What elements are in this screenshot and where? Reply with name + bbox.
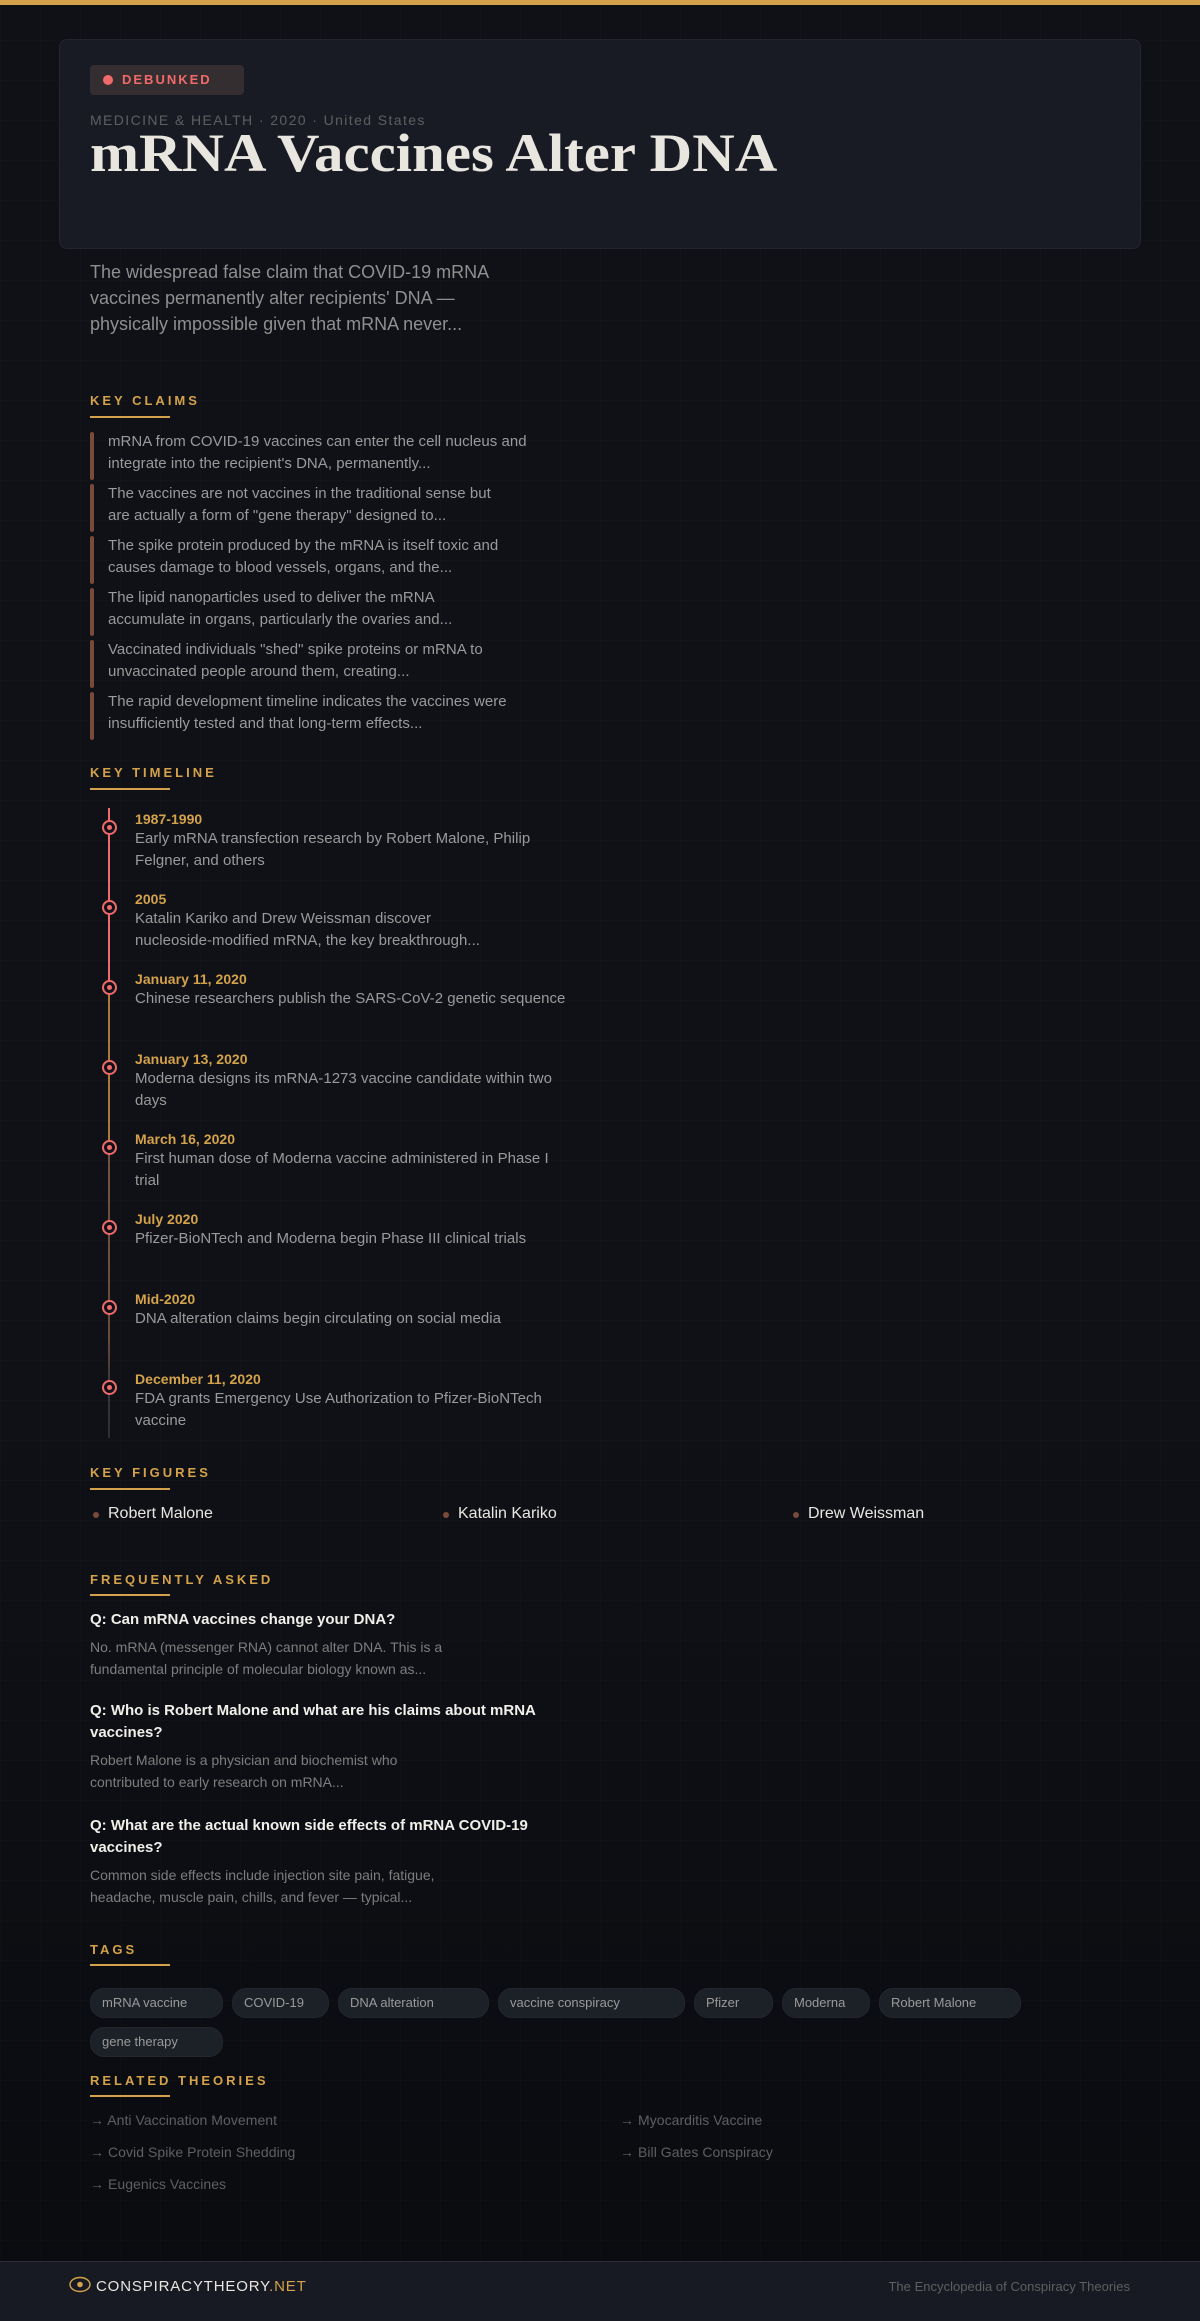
text: 1987-1990 bbox=[135, 811, 202, 827]
claim 1: mRNA from COVID-19 vaccines can enter the cell nucleus and bbox=[108, 433, 527, 450]
text: Mid-2020 bbox=[135, 1291, 195, 1307]
panel: key claims list bbox=[90, 432, 527, 740]
claim 5: Vaccinated individuals "shed" spike proteins or mRNA to bbox=[108, 641, 483, 658]
related theory: → Bill Gates Conspiracy bbox=[620, 2144, 773, 2160]
icon: status dot bbox=[103, 75, 113, 85]
claim 6: insufficiently tested and that long-term effects... bbox=[108, 715, 422, 732]
related theory: → Anti Vaccination Movement bbox=[90, 2112, 277, 2128]
question 2 bbox=[90, 1702, 536, 1741]
event marker 4 bbox=[102, 1060, 116, 1075]
heading: key timeline: KEY TIMELINE bbox=[90, 765, 217, 780]
text: Moderna designs its mRNA-1273 vaccine candidate within two bbox=[135, 1070, 552, 1087]
text: Pfizer-BioNTech and Moderna begin Phase III clinical trials bbox=[135, 1230, 526, 1247]
claim 4 bbox=[90, 588, 452, 636]
tag bbox=[90, 2027, 223, 2057]
claim 2: are actually a form of "gene therapy" designed to... bbox=[108, 507, 446, 524]
question 2: vaccines? bbox=[90, 1724, 163, 1741]
tag: Moderna bbox=[794, 1995, 845, 2010]
event marker 2 bbox=[102, 900, 116, 915]
figure: Katalin Kariko: Katalin Kariko bbox=[458, 1505, 557, 1522]
claim 6: The rapid development timeline indicates the vaccines were bbox=[108, 693, 507, 710]
top accent bar bbox=[0, 0, 1200, 5]
tag: Robert Malone bbox=[891, 1995, 976, 2010]
tag bbox=[498, 1988, 685, 2018]
question 3 bbox=[90, 1817, 528, 1856]
answer 3: Common side effects include injection site pain, fatigue, bbox=[90, 1867, 434, 1883]
text: Katalin Kariko and Drew Weissman discover bbox=[135, 910, 431, 927]
tag bbox=[879, 1988, 1021, 2018]
claim 3: causes damage to blood vessels, organs, and the... bbox=[108, 559, 452, 576]
text: March 16, 2020 bbox=[135, 1131, 235, 1147]
footer bbox=[0, 2261, 1200, 2321]
tag: COVID-19 bbox=[244, 1995, 304, 2010]
figure: Robert Malone: Robert Malone bbox=[108, 1505, 213, 1522]
tag: vaccine conspiracy bbox=[510, 1995, 620, 2010]
category and date line: MEDICINE & HEALTH · 2020 · United States bbox=[90, 112, 426, 128]
panel: hero header bbox=[59, 39, 1141, 249]
text: Early mRNA transfection research by Robert Malone, Philip bbox=[135, 830, 530, 847]
claim 6 bbox=[90, 692, 507, 740]
answer 1 bbox=[90, 1639, 442, 1677]
text: 2005 bbox=[135, 891, 166, 907]
tag: DNA alteration bbox=[350, 1995, 434, 2010]
claim 5: unvaccinated people around them, creating... bbox=[108, 663, 410, 680]
summary text: vaccines permanently alter recipients' DNA — bbox=[90, 288, 455, 308]
logo wordmark: CONSPIRACYTHEORY.NET bbox=[96, 2278, 307, 2295]
related theory: → Myocarditis Vaccine bbox=[620, 2112, 762, 2128]
question 1: Q: Can mRNA vaccines change your DNA? bbox=[90, 1611, 395, 1628]
event 8 bbox=[135, 1371, 542, 1429]
tag: mRNA vaccine bbox=[102, 1995, 187, 2010]
footer tagline: The Encyclopedia of Conspiracy Theories bbox=[888, 2279, 1130, 2294]
heading: frequently asked: FREQUENTLY ASKED bbox=[90, 1572, 273, 1587]
text: vaccine bbox=[135, 1412, 186, 1429]
claim 4: The lipid nanoparticles used to deliver the mRNA bbox=[108, 589, 435, 606]
event 2 bbox=[135, 891, 480, 949]
summary text: The widespread false claim that COVID-19 mRNA bbox=[90, 262, 489, 282]
event 5 bbox=[135, 1131, 549, 1189]
claim 1 bbox=[90, 432, 527, 480]
claim 3 bbox=[90, 536, 498, 584]
question 3: Q: What are the actual known side effects of mRNA COVID-19 bbox=[90, 1817, 528, 1834]
heading: related theories: RELATED THEORIES bbox=[90, 2073, 268, 2088]
text: First human dose of Moderna vaccine administered in Phase I bbox=[135, 1150, 549, 1167]
event marker 5 bbox=[102, 1140, 116, 1155]
text: July 2020 bbox=[135, 1211, 198, 1227]
text: December 11, 2020 bbox=[135, 1371, 261, 1387]
claim 5 bbox=[90, 640, 483, 688]
tag bbox=[338, 1988, 489, 2018]
event marker 6 bbox=[102, 1220, 116, 1235]
answer 3: headache, muscle pain, chills, and fever — typical... bbox=[90, 1889, 412, 1905]
answer 3 bbox=[90, 1867, 434, 1905]
event marker 8 bbox=[102, 1380, 116, 1395]
related theory: → Covid Spike Protein Shedding bbox=[90, 2144, 295, 2160]
answer 2: contributed to early research on mRNA... bbox=[90, 1774, 344, 1790]
tag bbox=[782, 1988, 870, 2018]
text: nucleoside-modified mRNA, the key breakthrough... bbox=[135, 932, 480, 949]
answer 2: Robert Malone is a physician and biochemist who bbox=[90, 1752, 397, 1768]
tag: Pfizer bbox=[706, 1995, 739, 2010]
tag: gene therapy bbox=[102, 2034, 178, 2049]
answer 1: fundamental principle of molecular biology known as... bbox=[90, 1661, 426, 1677]
answer 1: No. mRNA (messenger RNA) cannot alter DNA. This is a bbox=[90, 1639, 442, 1655]
event 3 bbox=[135, 971, 565, 1007]
related theory: → Eugenics Vaccines bbox=[90, 2176, 226, 2192]
event marker 7 bbox=[102, 1300, 116, 1315]
text: trial bbox=[135, 1172, 159, 1189]
event 1 bbox=[135, 811, 530, 869]
question 2: Q: Who is Robert Malone and what are his claims about mRNA bbox=[90, 1702, 536, 1719]
claim 3: The spike protein produced by the mRNA is itself toxic and bbox=[108, 537, 498, 554]
timeline axis bbox=[108, 808, 110, 1438]
text: FDA grants Emergency Use Authorization to Pfizer-BioNTech bbox=[135, 1390, 542, 1407]
claim 4: accumulate in organs, particularly the ovaries and... bbox=[108, 611, 452, 628]
heading: tags: TAGS bbox=[90, 1942, 137, 1957]
tag bbox=[90, 1988, 223, 2018]
figure: Drew Weissman: Drew Weissman bbox=[808, 1505, 924, 1522]
badge label: DEBUNKED bbox=[122, 72, 212, 87]
event marker 1 bbox=[102, 820, 116, 835]
claim 1: integrate into the recipient's DNA, permanently... bbox=[108, 455, 431, 472]
timeline bbox=[108, 808, 110, 1438]
heading: key figures: KEY FIGURES bbox=[90, 1465, 211, 1480]
claim 2 bbox=[90, 484, 491, 532]
claim 2: The vaccines are not vaccines in the traditional sense but bbox=[108, 485, 491, 502]
answer 2 bbox=[90, 1752, 397, 1790]
title: mRNA Vaccines Alter DNA bbox=[90, 123, 777, 183]
heading: key claims: KEY CLAIMS bbox=[90, 393, 200, 408]
text: Felgner, and others bbox=[135, 852, 265, 869]
text: January 13, 2020 bbox=[135, 1051, 248, 1067]
tag bbox=[694, 1988, 773, 2018]
icon: eye logo bbox=[69, 2276, 91, 2292]
text: January 11, 2020 bbox=[135, 971, 247, 987]
question 3: vaccines? bbox=[90, 1839, 163, 1856]
event marker 3 bbox=[102, 980, 116, 995]
text: days bbox=[135, 1092, 167, 1109]
text: DNA alteration claims begin circulating on social media bbox=[135, 1310, 501, 1327]
badge: debunked bbox=[90, 65, 244, 95]
event 7 bbox=[135, 1291, 501, 1327]
tag bbox=[232, 1988, 329, 2018]
event 4 bbox=[135, 1051, 552, 1109]
summary text bbox=[90, 262, 489, 334]
event 6 bbox=[135, 1211, 526, 1247]
summary text: physically impossible given that mRNA never... bbox=[90, 314, 462, 334]
text: Chinese researchers publish the SARS-CoV-2 genetic sequence bbox=[135, 990, 565, 1007]
